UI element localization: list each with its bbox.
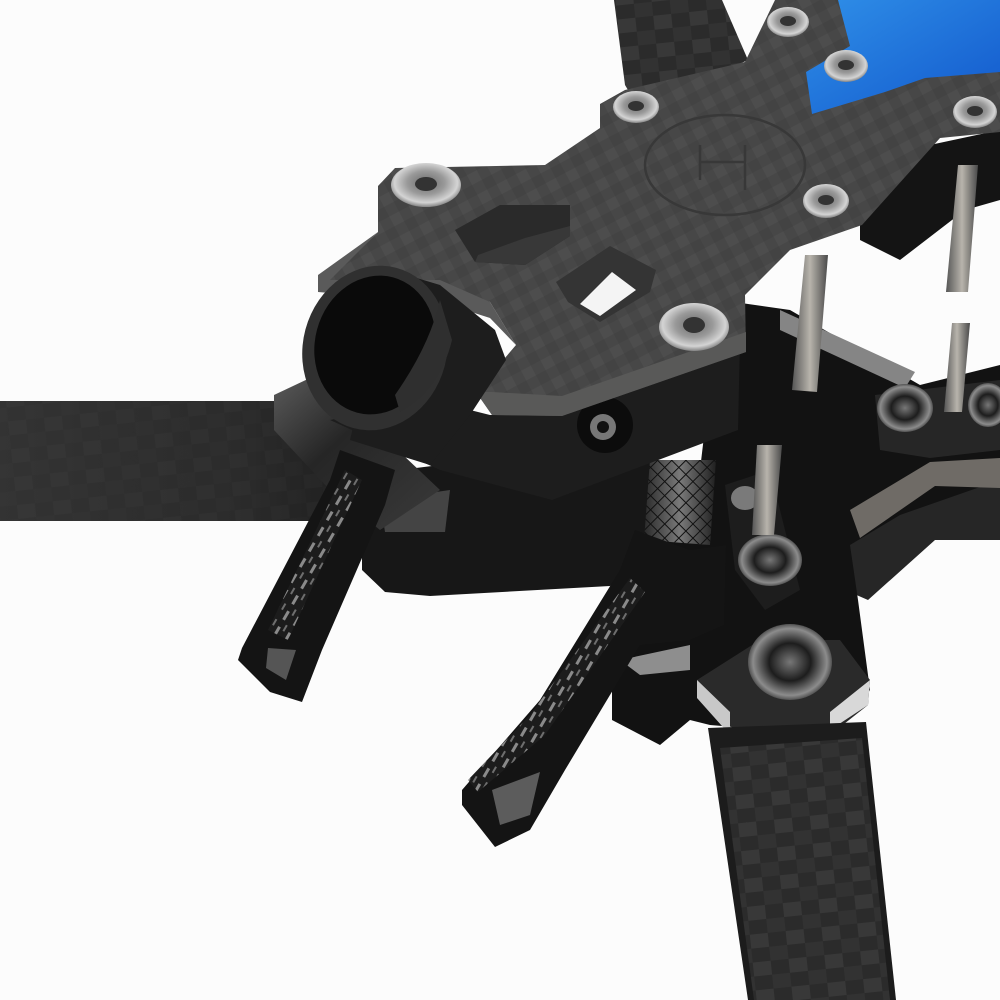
blue printed part — [806, 0, 1000, 114]
plate screws — [391, 7, 997, 351]
antenna mount: left — [238, 450, 395, 702]
upper carbon arm — [614, 0, 748, 110]
right lower carbon arm — [840, 455, 1000, 600]
glossy metal top of centre — [725, 310, 1000, 610]
left carbon arm — [0, 401, 340, 521]
printed camera mount body — [330, 340, 740, 500]
metal foot of lower arm — [620, 624, 870, 735]
knurled standoff — [644, 460, 716, 545]
metal plate under arm — [274, 378, 440, 530]
underside of top plate — [860, 130, 1000, 260]
mount screw recess — [577, 397, 633, 453]
plate logo — [645, 115, 805, 215]
bottom carbon arm — [708, 722, 896, 1000]
top carbon plate — [318, 0, 1000, 416]
central black frame — [612, 300, 1000, 745]
plate cut-out: lower hole — [556, 246, 656, 322]
plate cut-out: hexagon hole — [455, 205, 570, 265]
lower plate metal edge — [380, 490, 450, 532]
threaded standoffs — [610, 165, 978, 535]
lower plate: black body — [362, 440, 720, 596]
antenna mount: right — [462, 530, 726, 847]
camera tube — [284, 249, 506, 465]
